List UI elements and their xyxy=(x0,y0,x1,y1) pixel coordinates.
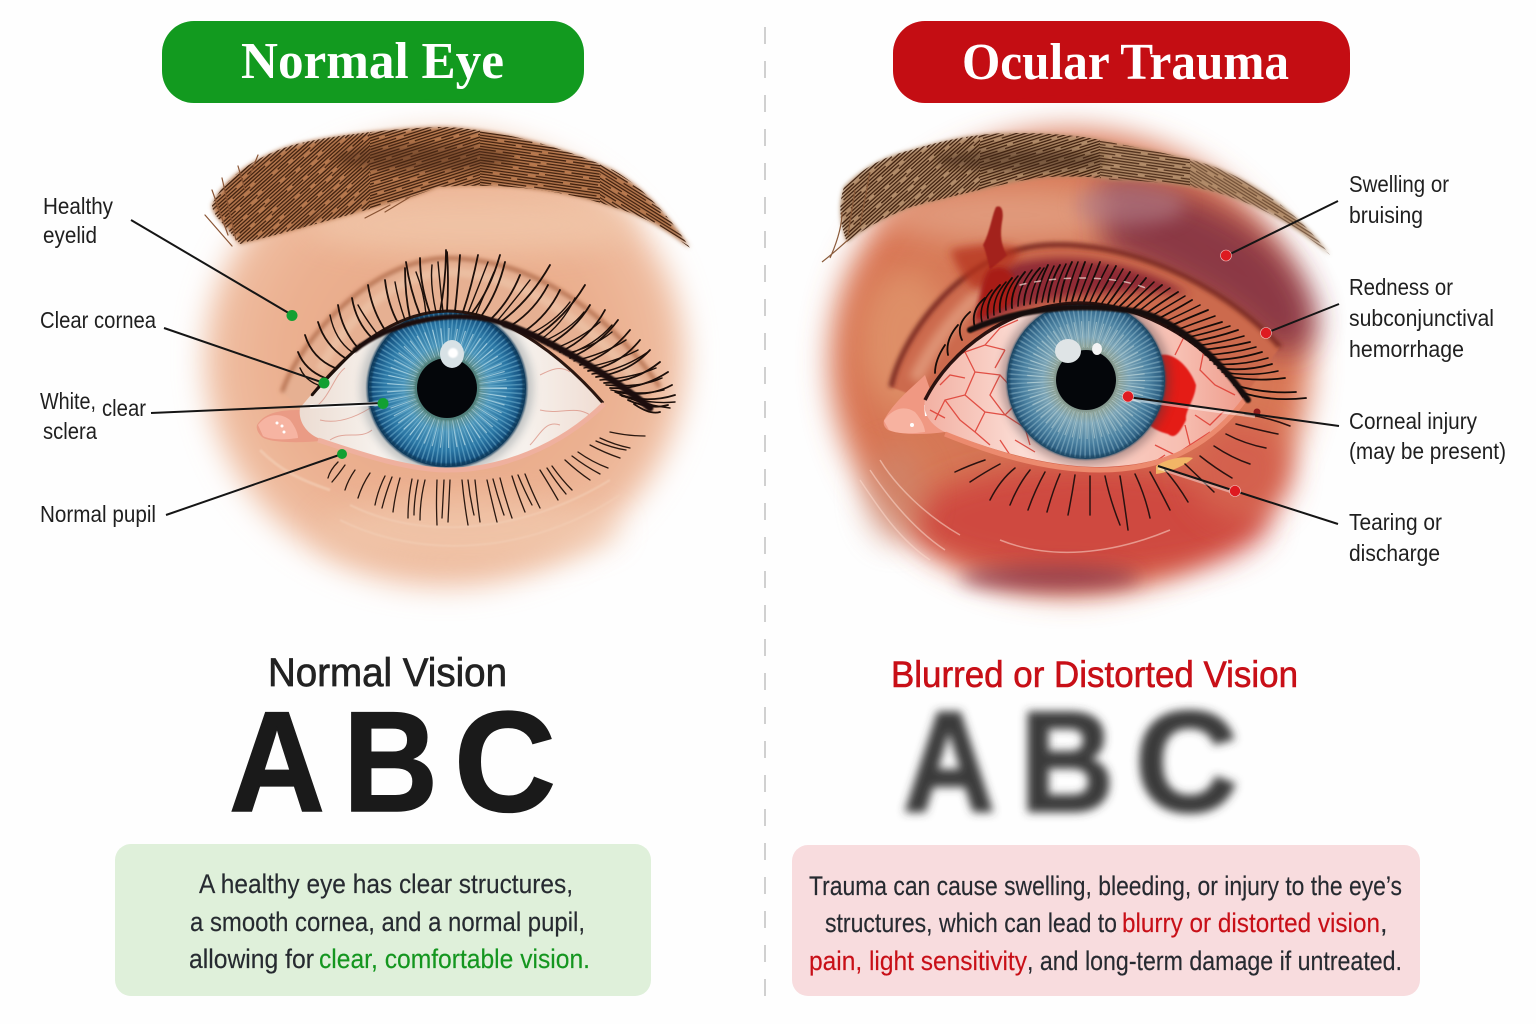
sharp ABC chart: A xyxy=(229,683,325,842)
sharp ABC chart: B xyxy=(343,683,438,842)
skin xyxy=(205,134,685,586)
upper eyelid xyxy=(282,258,660,408)
description box: trauma: blurry or distorted vision xyxy=(1122,908,1380,938)
lid margin line xyxy=(312,311,603,403)
label: Healthy eyelid: Healthy xyxy=(43,193,113,219)
label: Redness or subconjunctival hemorrhage: subconjunctival xyxy=(1349,305,1494,331)
lower lid rim xyxy=(945,398,1246,470)
callout lines and dots xyxy=(131,220,388,515)
label: Redness or subconjunctival hemorrhage xyxy=(1349,274,1494,362)
blurred ABC chart: A xyxy=(903,683,995,842)
label: Tearing or discharge xyxy=(1349,509,1442,566)
skin and bruising xyxy=(830,130,1316,594)
description box: trauma: Trauma can cause swelling, bleeding, or injury to the eye’s xyxy=(809,871,1402,901)
title pill: Ocular Trauma: Ocular Trauma xyxy=(962,34,1289,91)
tiny dark red mark xyxy=(1254,408,1260,416)
lower eyelid folds xyxy=(260,450,620,546)
illustration: injured eye xyxy=(822,120,1340,594)
blurred ABC chart: C xyxy=(1135,683,1238,842)
label: White, clear sclera: clear xyxy=(102,395,146,421)
label: Tearing or discharge: Tearing or xyxy=(1349,509,1442,535)
description box: trauma xyxy=(792,845,1420,996)
swollen upper eyelid xyxy=(891,245,1280,400)
label: White, clear sclera: sclera xyxy=(43,418,97,444)
description box: healthy eye: a smooth cornea, and a normal pupil, xyxy=(190,907,585,937)
description box: healthy eye: clear, comfortable vision. xyxy=(319,944,590,974)
divider xyxy=(764,27,766,996)
lower lashes xyxy=(955,414,1290,530)
sharp ABC chart: C xyxy=(454,683,556,842)
sharp ABC chart xyxy=(229,683,556,842)
panel: ocular trauma xyxy=(792,21,1506,996)
label: Normal pupil: Normal pupil xyxy=(40,501,156,527)
lower lashes xyxy=(328,432,645,525)
lid margin line xyxy=(925,303,1244,400)
description box: healthy eye: A healthy eye has clear structures, xyxy=(199,869,573,899)
label: Swelling or bruising xyxy=(1349,171,1449,228)
iris and pupil xyxy=(361,302,533,474)
label: Redness or subconjunctival hemorrhage: Redness or xyxy=(1349,274,1453,300)
lid highlights xyxy=(860,460,1170,560)
title pill: Ocular Trauma xyxy=(893,21,1350,103)
title pill: Normal Eye xyxy=(162,21,584,103)
label: Swelling or bruising: Swelling or xyxy=(1349,171,1449,197)
description box: healthy eye: allowing for xyxy=(189,944,314,974)
label: White, clear sclera: White, xyxy=(40,388,96,414)
label: Clear cornea: Clear cornea xyxy=(40,307,156,333)
label: Redness or subconjunctival hemorrhage: hemorrhage xyxy=(1349,336,1464,362)
illustration: healthy eye xyxy=(200,120,700,586)
label: White, clear sclera xyxy=(40,388,146,444)
label: Healthy eyelid: eyelid xyxy=(43,222,97,248)
blurred ABC chart: B xyxy=(1020,683,1114,842)
label: Corneal injury (may be present): (may be present) xyxy=(1349,438,1506,464)
label: Tearing or discharge: discharge xyxy=(1349,540,1440,566)
eyebrow xyxy=(200,120,700,250)
lower lid rim xyxy=(318,404,604,470)
blurred ABC chart xyxy=(903,683,1238,842)
description box: trauma: , xyxy=(1380,908,1388,938)
description box: trauma: , and long-term damage if untreated. xyxy=(1027,946,1402,976)
label: Corneal injury (may be present): Corneal injury xyxy=(1349,408,1477,434)
upper lashes xyxy=(935,262,1306,400)
subconjunctival hemorrhage xyxy=(1145,355,1196,436)
caruncle xyxy=(257,410,320,442)
description box: healthy eye xyxy=(115,844,651,996)
callout lines and dots xyxy=(1122,201,1339,524)
sclera xyxy=(300,311,603,468)
label: Corneal injury (may be present) xyxy=(1349,408,1506,464)
discharge xyxy=(1156,457,1193,474)
eyebrow xyxy=(822,120,1340,262)
iris and pupil xyxy=(1001,295,1171,465)
bloodshot sclera xyxy=(924,303,1244,467)
description box: trauma: pain, light sensitivity xyxy=(809,946,1027,976)
heading: Normal Vision: Normal Vision xyxy=(268,651,507,695)
heading: Blurred or Distorted Vision: Blurred or Distorted Vision xyxy=(891,654,1298,695)
description box: trauma: structures, which can lead to xyxy=(825,908,1117,938)
label: Swelling or bruising: bruising xyxy=(1349,202,1423,228)
caruncle xyxy=(884,375,945,434)
label: Healthy eyelid xyxy=(43,193,113,248)
title pill: Normal Eye: Normal Eye xyxy=(241,33,504,90)
laceration xyxy=(950,206,1020,320)
panel: normal eye xyxy=(40,21,700,996)
upper lashes xyxy=(298,250,675,413)
